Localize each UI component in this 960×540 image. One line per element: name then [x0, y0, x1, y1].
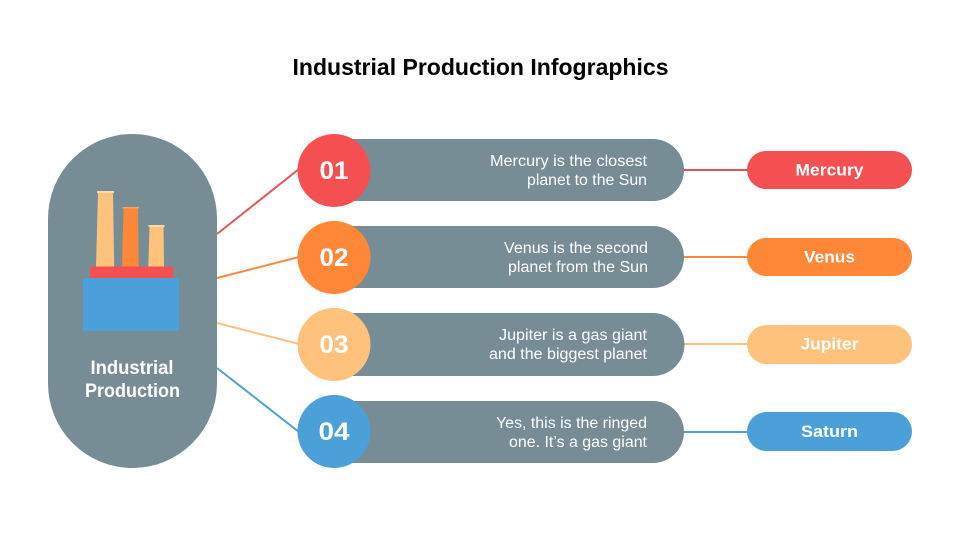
number badge 01: 01 [320, 157, 349, 185]
number badge 03 [298, 308, 370, 381]
number badge 04 [298, 395, 370, 468]
tag: Saturn [747, 412, 912, 451]
tag: Venus [747, 238, 912, 276]
description bar 3 [334, 313, 685, 376]
description bar 1: Mercury is the closest [490, 153, 648, 170]
description bar 1: planet to the Sun [527, 172, 647, 189]
row 2: Venus [298, 221, 912, 294]
tag: Mercury: Mercury [796, 160, 864, 180]
number badge 02: 02 [320, 244, 348, 272]
title: Industrial Production Infographics [292, 54, 668, 80]
description bar 4: one. It’s a gas giant [509, 434, 648, 451]
label: industrial production: Production [85, 380, 180, 402]
description bar 3: and the biggest planet [489, 346, 648, 363]
row 4: Saturn [298, 395, 912, 468]
description bar 4: Yes, this is the ringed [496, 415, 647, 432]
icon: factory [83, 191, 179, 331]
tag: Venus: Venus [804, 248, 855, 266]
description bar 2 [334, 226, 684, 288]
label: industrial production [85, 357, 180, 402]
connector lines: left [217, 169, 299, 432]
description bar 4 [334, 401, 684, 463]
description bar 2: Venus is the second [504, 240, 648, 257]
row 1: Mercury [298, 134, 912, 207]
tag: Jupiter: Jupiter [800, 334, 859, 354]
number badge 03: 03 [320, 331, 348, 359]
row 3: Jupiter [298, 308, 912, 381]
label: industrial production: Industrial [90, 357, 174, 379]
description bar 1 [334, 139, 684, 201]
connector lines: right [680, 170, 748, 432]
tag: Saturn: Saturn [801, 422, 858, 441]
description bar 2: planet from the Sun [508, 259, 648, 276]
number badge 02 [298, 221, 370, 294]
number badge 04: 04 [318, 418, 350, 446]
panel: industrial production [48, 134, 217, 468]
tag: Jupiter [747, 325, 912, 364]
number badge 01 [298, 134, 370, 207]
tag: Mercury [747, 151, 912, 189]
description bar 3: Jupiter is a gas giant [499, 327, 648, 344]
